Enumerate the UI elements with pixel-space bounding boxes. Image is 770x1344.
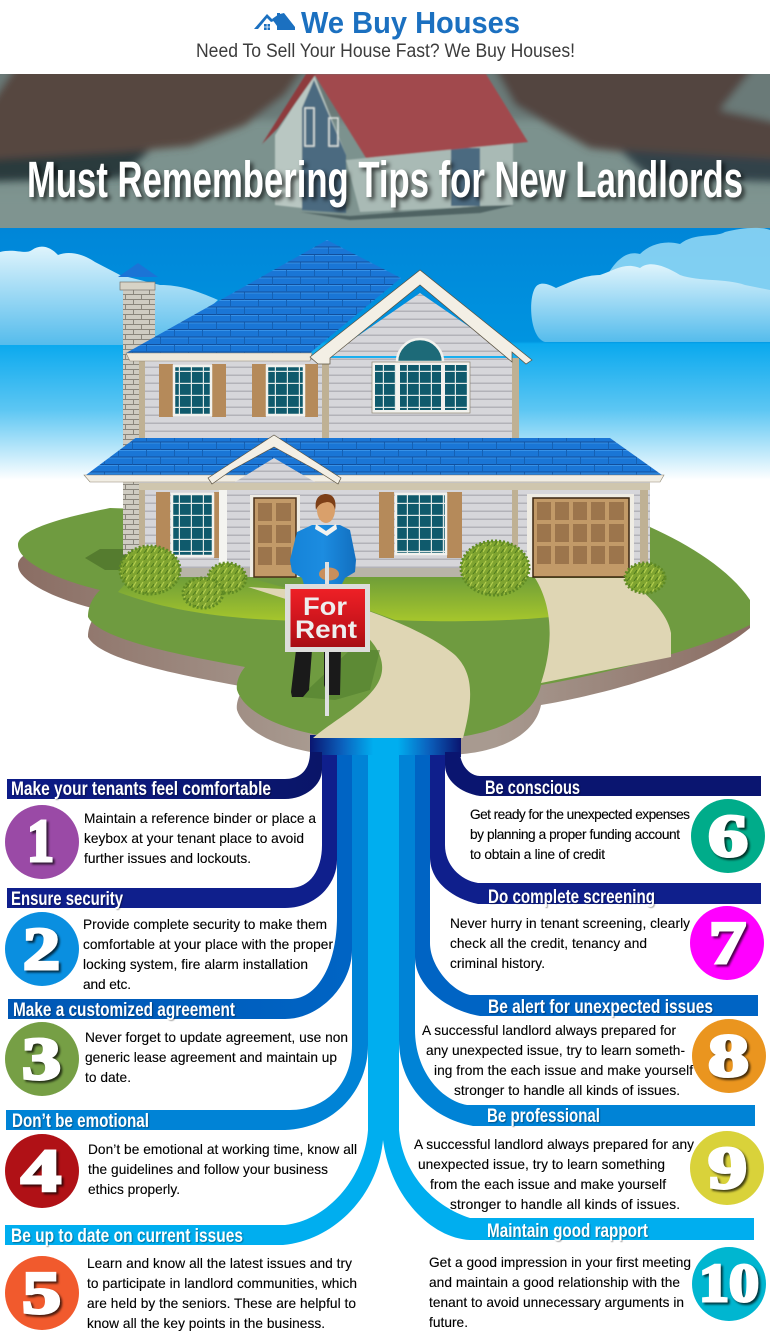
man head (317, 497, 335, 523)
ground shadow (85, 549, 125, 570)
body 3: generic lease agreement and maintain up (85, 1050, 337, 1065)
body 9: from the each issue and make yourself (430, 1177, 666, 1192)
badge 7 (690, 906, 764, 980)
body 1: further issues and lockouts. (84, 851, 251, 866)
header tagline: Need To Sell Your House Fast? We Buy Houses! (196, 41, 575, 62)
heading 5: Be up to date on current issues (11, 1225, 243, 1247)
badge 8: 8 (708, 1023, 749, 1089)
badge 10: 10 (699, 1253, 759, 1313)
badge 8 (692, 1019, 766, 1093)
arm 2 (7, 755, 337, 908)
tip 4: don't be emotional (5, 1110, 357, 1208)
gable arched window (372, 339, 470, 413)
body 8: any unexpected issue, try to learn someth- (426, 1043, 685, 1058)
body 7: check all the credit, tenancy and (450, 936, 647, 951)
heading 10: Maintain good rapport (487, 1220, 648, 1242)
body 2 (83, 917, 333, 992)
body 9 (414, 1137, 694, 1212)
tip 8: be alert for unexpected issues (422, 996, 766, 1098)
badge 1 (5, 805, 79, 879)
body 8: stronger to handle all kinds of issues. (454, 1083, 680, 1098)
tip 5: be up to date on current issues (5, 1225, 357, 1331)
body 2: locking system, fire alarm installation (83, 957, 308, 972)
body 1: Maintain a reference binder or place a (84, 811, 316, 826)
man hair (316, 494, 336, 510)
lower roof (86, 438, 662, 475)
sign post (325, 562, 329, 716)
driveway (535, 578, 671, 683)
body 2: comfortable at your place with the proper (83, 937, 333, 952)
lower centre window (379, 492, 462, 558)
header logo: We Buy Houses (254, 5, 520, 40)
arm 4 (6, 755, 368, 1130)
cloud left (0, 247, 218, 345)
body 5 (87, 1256, 357, 1331)
man holding for-rent sign: Rent (295, 616, 358, 644)
body 1: keybox at your tenant place to avoid (84, 831, 304, 846)
man sweater (290, 525, 356, 588)
man hands (319, 568, 339, 580)
heading 6: Be conscious (485, 777, 580, 799)
body 6: Get ready for the unexpected expenses (470, 807, 690, 822)
sign text: For (303, 593, 347, 621)
body 5: Learn and know all the latest issues and try (87, 1256, 352, 1271)
hero sky with clouds (0, 228, 770, 480)
cloud right (531, 228, 770, 342)
badge 1: 1 (27, 808, 54, 874)
island rim (18, 528, 750, 755)
body 10: Get a good impression in your first meeting (429, 1255, 691, 1270)
body 5: are held by the seniors. These are helpful to (87, 1296, 356, 1311)
heading 2: Ensure security (11, 888, 123, 910)
banner photo: blurred hands around model house (0, 60, 770, 245)
body 4: ethics properly. (88, 1182, 180, 1197)
badge 4 (5, 1134, 79, 1208)
body 2: and etc. (83, 977, 131, 992)
body 8: ing from the each issue and make yourself (434, 1063, 693, 1078)
body 2: Provide complete security to make them (83, 917, 327, 932)
arm 8 (415, 755, 758, 1016)
stem top band (310, 735, 461, 757)
badge 5 (5, 1256, 79, 1330)
tip 1: make your tenants feel comfortable (5, 778, 316, 879)
badge 5: 5 (22, 1260, 61, 1326)
arm 5 and 10 trunk (5, 755, 754, 1245)
body 6: by planning a proper funding account (470, 827, 680, 842)
body 3: Never forget to update agreement, use non (85, 1030, 348, 1045)
body 8 (422, 1023, 693, 1098)
body 3: to date. (85, 1070, 131, 1085)
body 6 (470, 807, 690, 862)
badge 7: 7 (709, 910, 746, 976)
badge 6: 6 (708, 803, 748, 869)
badge 4: 4 (21, 1138, 61, 1204)
arm 3 (8, 755, 352, 1019)
body 4 (88, 1142, 357, 1197)
arm 6 (445, 752, 761, 796)
badge 9 (690, 1131, 764, 1205)
heading 3: Make a customized agreement (13, 999, 235, 1021)
man holding for-rent sign (285, 494, 380, 716)
body 9: A successful landlord always prepared for any (414, 1137, 694, 1152)
chimney (118, 263, 158, 555)
body 10: future. (429, 1315, 468, 1330)
upper windows and shutters (159, 364, 318, 417)
body 10 (429, 1255, 691, 1330)
lower left window (156, 492, 219, 558)
tip 6: be conscious (470, 777, 765, 873)
tip 7: do complete screening (450, 886, 764, 980)
body 7: Never hurry in tenant screening, clearly (450, 916, 690, 931)
body 1 (84, 811, 316, 866)
main roof (126, 240, 401, 353)
bushes (120, 541, 665, 608)
body 4: Don’t be emotional at working time, know all (88, 1142, 357, 1157)
man collar (315, 524, 337, 536)
body 3 (85, 1030, 348, 1085)
tip 3: make a customized agreement (5, 999, 348, 1096)
tip 10: maintain good rapport (429, 1220, 766, 1330)
badge 9: 9 (708, 1135, 747, 1201)
man legs (291, 650, 341, 697)
badge 2: 2 (23, 916, 60, 982)
body 10: and maintain a good relationship with the (429, 1275, 680, 1290)
island grass (18, 508, 750, 738)
body 10: tenant to avoid unnecessary arguments in (429, 1295, 684, 1310)
lighter lawn (118, 578, 330, 621)
garage door (527, 494, 634, 577)
body 5: to participate in landlord communities, which (87, 1276, 357, 1291)
tip 9: be professional (414, 1105, 764, 1212)
house illustration (84, 240, 664, 577)
body 9: unexpected issue, try to learn something (418, 1157, 665, 1172)
body 5: know all the key points in the business. (87, 1316, 325, 1331)
front door (250, 495, 300, 577)
heading 9: Be professional (487, 1105, 600, 1127)
front gable trim (310, 270, 532, 364)
body 7: criminal history. (450, 956, 545, 971)
lawn island base and stem (18, 508, 750, 757)
icon: house logo (254, 13, 295, 30)
sign board (285, 584, 370, 652)
tip 2: ensure security (5, 888, 333, 992)
arm 9 (399, 755, 755, 1126)
lower eave (84, 475, 664, 482)
body 6: to obtain a line of credit (470, 847, 605, 862)
lower wall (139, 482, 650, 577)
porch gable (208, 435, 341, 484)
body 8: A successful landlord always prepared for (422, 1023, 676, 1038)
badge 3: 3 (22, 1026, 61, 1092)
badge 6 (691, 799, 765, 873)
logo wordmark: We Buy Houses (301, 5, 520, 40)
body 4: the guidelines and follow your business (88, 1162, 328, 1177)
central trunk and light blue arms (5, 752, 761, 1245)
badge 10 (692, 1247, 766, 1321)
banner with blurred house photo and title (0, 60, 770, 245)
heading 4: Don’t be emotional (12, 1110, 149, 1132)
body 9: stronger to handle all kinds of issues. (450, 1197, 680, 1212)
heading 7: Do complete screening (488, 886, 655, 908)
man shadow (300, 650, 380, 700)
badge 2 (5, 912, 79, 986)
arm 7 (430, 755, 761, 904)
upper wall (139, 293, 519, 440)
heading 1: Make your tenants feel comfortable (11, 778, 271, 800)
walkway (248, 587, 470, 738)
badge 3 (5, 1022, 79, 1096)
roof eave (126, 353, 312, 361)
heading 8: Be alert for unexpected issues (488, 996, 713, 1018)
body 7 (450, 916, 690, 971)
arm 1 (7, 752, 322, 799)
